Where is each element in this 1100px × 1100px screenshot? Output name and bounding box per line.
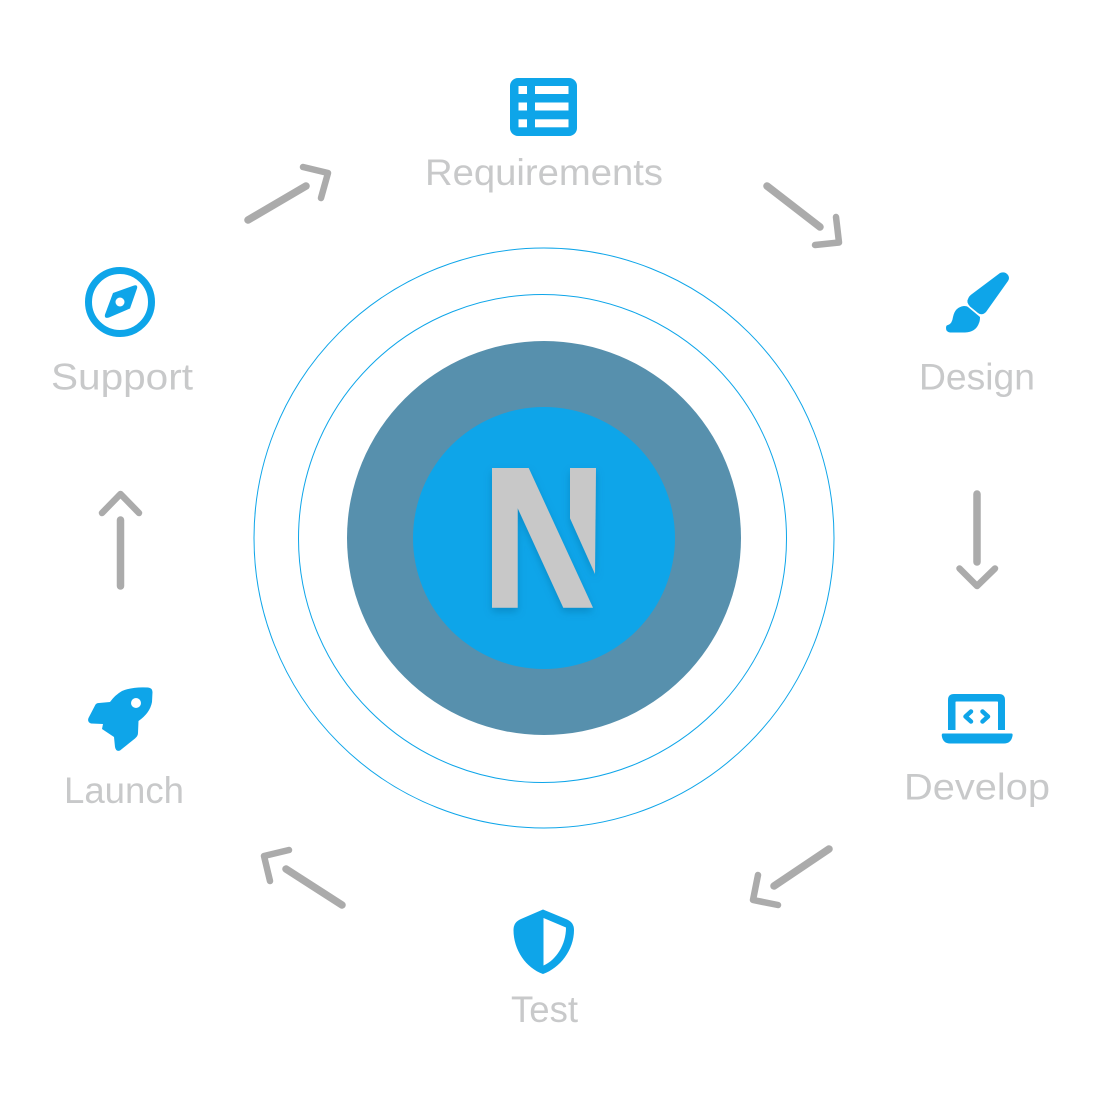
step: Design — [919, 272, 1035, 398]
label: Develop: Develop — [904, 766, 1050, 808]
icon: compass — [88, 270, 152, 334]
inner disc — [413, 407, 675, 669]
arrow: requirements to design — [767, 186, 839, 245]
label: Test: Test — [511, 989, 579, 1030]
step: Requirements — [425, 78, 663, 193]
outer ring — [254, 248, 834, 828]
step: Test — [511, 910, 579, 1030]
step: Support — [51, 270, 194, 398]
logo letter N — [492, 468, 596, 608]
step: Launch — [64, 687, 184, 811]
arrow: launch to support — [102, 494, 139, 586]
label: Support: Support — [51, 356, 194, 398]
arrow: support to requirements — [248, 167, 328, 220]
label: Launch: Launch — [64, 770, 184, 811]
label: Requirements: Requirements — [425, 152, 663, 193]
icon: table list — [510, 78, 577, 136]
middle ring — [298, 294, 786, 782]
icon: laptop with code — [942, 694, 1013, 744]
label: Design: Design — [919, 356, 1035, 398]
arrow: test to launch — [264, 850, 342, 905]
arrow: design to develop — [960, 494, 995, 586]
icon: shield — [514, 910, 574, 974]
arrow: develop to test — [753, 849, 829, 905]
step: Develop — [904, 694, 1050, 808]
icon: paint brush — [946, 272, 1009, 332]
icon: rocket — [88, 687, 152, 751]
central logo with rings — [254, 248, 834, 828]
dark disc — [347, 341, 741, 735]
